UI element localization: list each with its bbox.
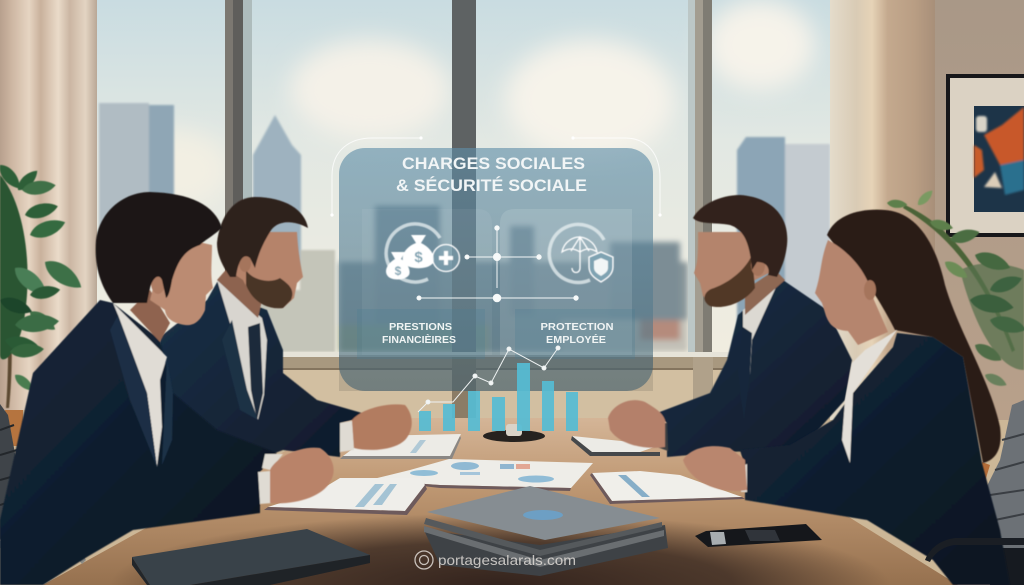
subtitle: & SÉCURITÉ SOCIALE (396, 176, 587, 195)
label: prestations financières: FINANCIÈIRES (382, 333, 456, 346)
shirt and tie (655, 285, 777, 451)
face (815, 240, 888, 345)
title: CHARGES SOCIALES (402, 154, 585, 173)
suit (657, 278, 852, 457)
label box: left (357, 309, 485, 359)
person: front left man (0, 192, 334, 585)
inner card: left (362, 209, 492, 355)
label: prestations financières (382, 321, 456, 346)
document: left front (264, 478, 427, 515)
window frames (225, 0, 712, 358)
document: right (590, 471, 745, 504)
icon: watermark logo (415, 551, 433, 569)
face (694, 232, 785, 315)
window sill (97, 352, 832, 418)
suit (160, 277, 362, 470)
watermark (415, 551, 576, 569)
hands (683, 446, 747, 491)
corner bracket: left (330, 136, 423, 217)
icon: money bags: $ (395, 264, 402, 278)
label box: right (515, 309, 635, 359)
icon: money bags: $ (414, 249, 423, 266)
inner card: right (500, 209, 632, 355)
plant left (0, 161, 86, 408)
person: front right woman (683, 210, 1010, 585)
smartphone (695, 524, 822, 547)
hands (352, 404, 412, 450)
label: protection employée: EMPLOYÉE (546, 333, 606, 346)
conference table (43, 418, 958, 585)
hair (693, 195, 787, 277)
face (130, 240, 213, 342)
shirt (110, 303, 283, 504)
corner bracket: right (571, 136, 662, 217)
shirt and tie (217, 280, 354, 452)
face (217, 232, 303, 318)
suit (740, 333, 1010, 585)
person: rear right man (608, 195, 852, 457)
window glass with skyline (97, 0, 832, 355)
office chairs (0, 400, 1024, 585)
conference speaker (483, 424, 545, 442)
label: protection employée: PROTECTION (540, 321, 614, 333)
clipboard (571, 436, 660, 456)
watermark: portagesalarals.com (438, 552, 576, 568)
connector lines (417, 226, 578, 302)
framed painting (946, 74, 1024, 237)
icon: umbrella and shield (549, 224, 613, 282)
hands (608, 400, 665, 448)
label: prestations financières: PRESTIONS (389, 321, 452, 333)
documents on table (264, 434, 745, 515)
plant right (887, 188, 1024, 389)
translucent panel (330, 136, 662, 391)
stack of reports (424, 486, 668, 576)
shirt (740, 330, 897, 492)
document: left rear (340, 434, 461, 459)
icon: money bags (386, 224, 460, 282)
document: centre sheets (369, 459, 593, 491)
suit (0, 300, 277, 585)
hair (217, 197, 308, 277)
lower band of panel (339, 355, 653, 391)
closed laptop (132, 529, 370, 585)
long hair (827, 210, 1001, 463)
hands (270, 448, 334, 503)
chair arm: right (925, 538, 1024, 562)
label: protection employée (540, 321, 614, 346)
hair (96, 192, 222, 303)
curtains (0, 0, 1024, 446)
person: rear left man (160, 197, 412, 470)
trend line (418, 346, 560, 412)
bar chart (418, 346, 578, 431)
